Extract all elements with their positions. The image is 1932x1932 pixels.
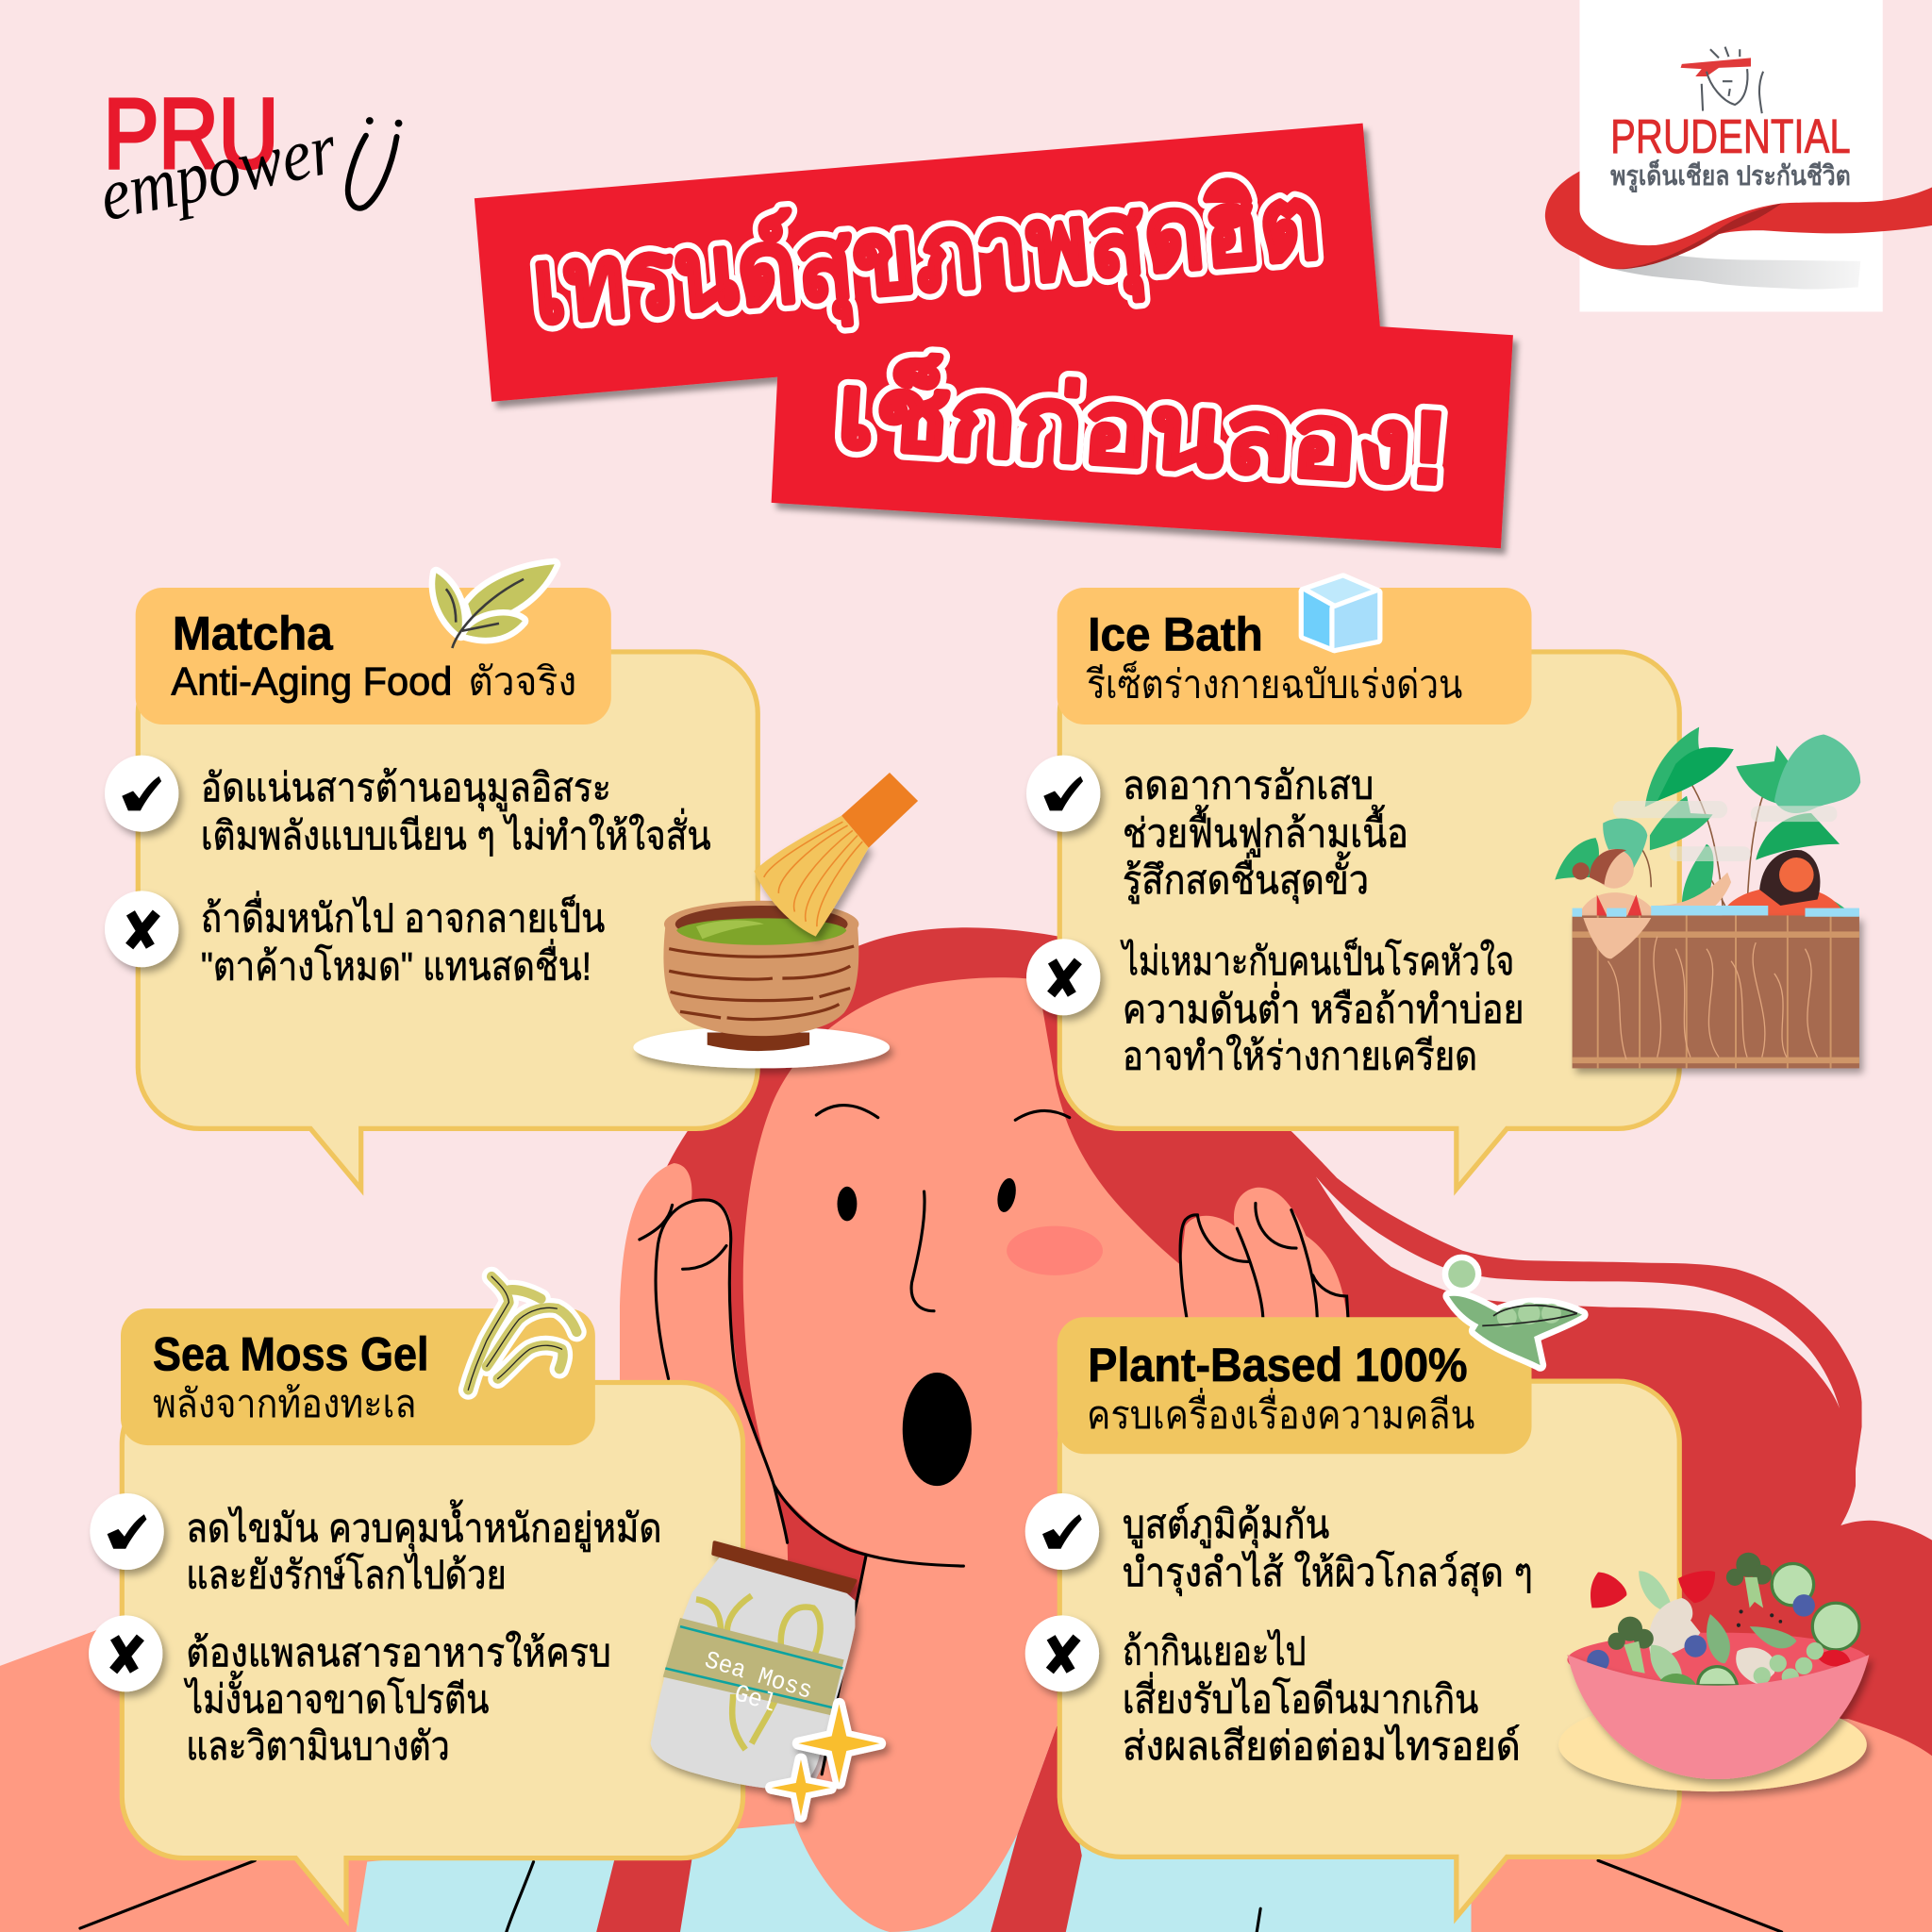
heading: Ice Bath xyxy=(1088,608,1263,661)
illustration: ice bath tub xyxy=(1555,727,1860,1068)
Mercury head emblem xyxy=(1681,47,1763,113)
subheading xyxy=(172,659,576,704)
con text: ถ้ากินเยอะไป xyxy=(1123,1629,1306,1674)
icon: leaf xyxy=(435,564,555,648)
con text: ต้องแพลนสารอาหารให้ครบ xyxy=(186,1630,611,1674)
right hand xyxy=(1180,1188,1348,1324)
con text xyxy=(184,1630,611,1768)
red banner shape xyxy=(475,124,1513,548)
grey swoosh xyxy=(1611,255,1860,289)
header tab xyxy=(1058,588,1532,724)
check badge xyxy=(90,1493,164,1570)
check badge xyxy=(1025,1493,1099,1570)
hair strand right xyxy=(991,1725,1082,1932)
con text: ไม่เหมาะกับคนเป็นโรคหัวใจ xyxy=(1120,938,1514,983)
hair xyxy=(641,927,1932,1780)
face lines xyxy=(640,1106,1348,1774)
pro text xyxy=(1123,762,1408,904)
pro text: และยังรักษ์โลกไปด้วย xyxy=(186,1553,507,1597)
panel: Plant-Based 100% xyxy=(1025,1260,1869,1917)
pro text: ช่วยฟื้นฟูกล้ามเนื้อ xyxy=(1123,804,1408,857)
con text xyxy=(201,891,605,988)
face and neck xyxy=(743,977,1183,1932)
con text: "ตาค้างโหมด" แทนสดชื่น! xyxy=(201,939,591,988)
title banner xyxy=(475,124,1513,548)
title line 2: เช็กก่อนลอง! xyxy=(834,348,1452,507)
con text: อาจทำให้ร่างกายเครียด xyxy=(1123,1034,1477,1078)
con text: และวิตามินบางตัว xyxy=(186,1724,450,1768)
body lines xyxy=(80,1860,1782,1932)
panel: Matcha xyxy=(105,564,918,1189)
pro text xyxy=(186,1499,661,1597)
PRU wordmark: PRU xyxy=(104,79,278,190)
illustration: sea moss jar xyxy=(651,1542,855,1789)
speech bubble xyxy=(138,652,758,1189)
pro text: บูสต์ภูมิคุ้มกัน xyxy=(1123,1502,1329,1548)
con text: ความดันต่ำ หรือถ้าทำบ่อย xyxy=(1123,982,1524,1031)
pro text: อัดแน่นสารต้านอนุมูลอิสระ xyxy=(201,765,611,811)
pro text xyxy=(1123,1502,1533,1596)
Thai company name: พรูเด็นเชียล ประกันชีวิต xyxy=(1610,158,1851,192)
logo: PRU empower U xyxy=(92,79,402,236)
title line 1: เทรนด์สุขภาพสุดฮิต xyxy=(528,164,1324,352)
mouth xyxy=(903,1373,972,1486)
illustration: sea moss jar: Gel xyxy=(731,1679,779,1719)
con text: ไม่งั้นอาจขาดโปรตีน xyxy=(184,1671,490,1722)
panel: Ice Bath xyxy=(1026,578,1860,1189)
pro text: บำรุงลำไส้ ให้ผิวโกลว์สุด ๆ xyxy=(1123,1550,1533,1596)
title line 2: เช็กก่อนลอง! xyxy=(834,348,1452,507)
con text: ส่งผลเสียต่อต่อมไทรอยด์ xyxy=(1123,1724,1521,1768)
header tab xyxy=(136,588,611,724)
white panel xyxy=(1579,0,1883,311)
icon: ice cube xyxy=(1304,578,1377,648)
pro text: ลดอาการอักเสบ xyxy=(1123,762,1374,807)
hair gap xyxy=(1316,1176,1840,1408)
pro text: ลดไขมัน ควบคุมน้ำหนักอยู่หมัด xyxy=(186,1499,661,1552)
con text: ถ้าดื่มหนักไป อาจกลายเป็น xyxy=(201,891,605,940)
speech bubble xyxy=(1059,652,1679,1189)
panel: Sea Moss Gel xyxy=(89,1276,880,1920)
subheading: พลังจากท้องทะเล xyxy=(153,1381,416,1425)
subheading: รีเซ็ตร่างกายฉบับเร่งด่วน xyxy=(1087,660,1462,706)
cross badge xyxy=(1025,1615,1099,1691)
cross badge xyxy=(1026,939,1100,1015)
con text xyxy=(1123,1629,1521,1768)
empower script: empower xyxy=(92,107,343,236)
subheading: ตัวจริง xyxy=(468,659,576,704)
speech bubble xyxy=(1059,1381,1679,1917)
illustration: salad bowl xyxy=(1558,1553,1869,1791)
shirt xyxy=(356,1725,1472,1932)
check badge xyxy=(105,756,178,832)
pro text xyxy=(201,765,711,858)
cross badge xyxy=(89,1615,162,1691)
blush xyxy=(1007,1226,1103,1275)
cross badge xyxy=(105,891,178,967)
left shoulder and hand xyxy=(0,1163,794,1932)
illustration: sea moss jar: Sea Moss xyxy=(701,1646,816,1706)
PRUDENTIAL wordmark: PRUDENTIAL xyxy=(1610,109,1851,163)
pro text: รู้สึกสดชื่นสุดขั้ว xyxy=(1123,851,1369,904)
subheading: Anti-Aging Food xyxy=(172,659,452,704)
title line 1: เทรนด์สุขภาพสุดฮิต xyxy=(528,164,1324,352)
subheading: ครบเครื่องเรื่องความคลีน xyxy=(1087,1388,1474,1437)
hair strand left xyxy=(596,1848,693,1932)
icon: edamame xyxy=(1448,1260,1582,1365)
header tab xyxy=(1058,1317,1532,1454)
con text: เสี่ยงรับไอโอดีนมากเกิน xyxy=(1123,1673,1478,1722)
heading: Sea Moss Gel xyxy=(153,1327,429,1380)
icon: sparkles xyxy=(772,1704,880,1816)
eyes xyxy=(838,1176,1019,1221)
heading: Matcha xyxy=(173,607,333,659)
illustration: matcha bowl and whisk xyxy=(633,773,918,1068)
right shoulder xyxy=(1472,1719,1932,1932)
header tab xyxy=(121,1308,595,1445)
logo: Prudential xyxy=(1545,0,1932,311)
red ribbon xyxy=(1545,172,1932,269)
con text xyxy=(1120,938,1524,1078)
heading: Plant-Based 100% xyxy=(1088,1339,1468,1391)
pro text: เติมพลังแบบเนียน ๆ ไม่ทำให้ใจสั่น xyxy=(201,808,711,858)
ribbon fold xyxy=(1611,204,1782,269)
check badge xyxy=(1026,756,1100,832)
character illustration xyxy=(0,927,1932,1932)
speech bubble xyxy=(122,1382,743,1920)
icon: sea moss xyxy=(468,1276,576,1390)
script U with dots xyxy=(348,117,402,208)
